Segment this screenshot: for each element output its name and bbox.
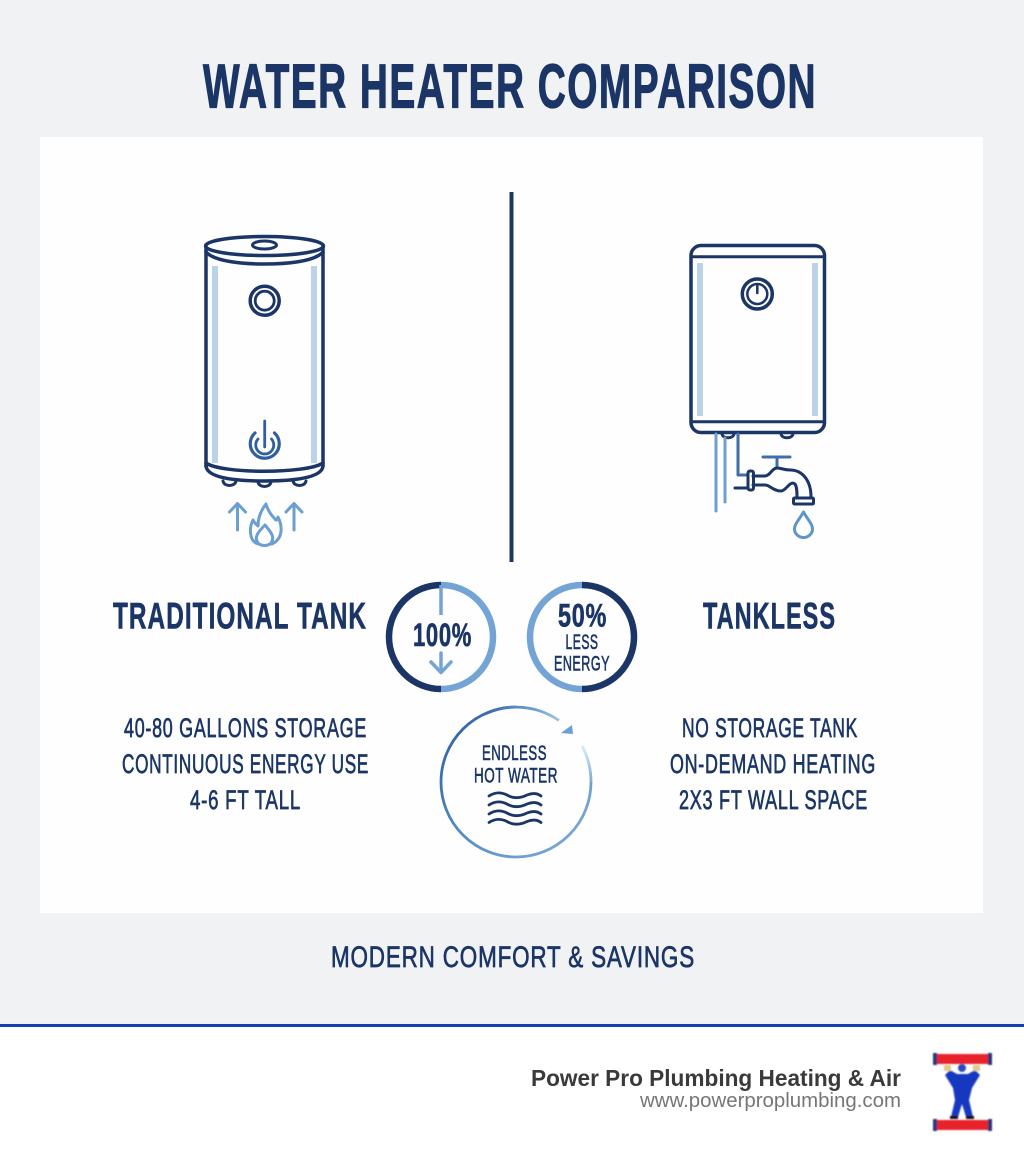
water drop (794, 512, 812, 538)
heading: tankless: TANKLESS (703, 596, 836, 636)
icon: traditional tank heater (206, 236, 324, 546)
list: traditional tank facts (122, 713, 369, 815)
icon: flame with arrows (230, 504, 302, 546)
list: tankless facts (670, 713, 876, 815)
list: traditional tank facts: 4-6 FT TALL (190, 785, 301, 815)
badge: endless hot water: HOT WATER (474, 764, 558, 788)
badge: endless hot water: ENDLESS (482, 742, 547, 765)
tagline: MODERN COMFORT & SAVINGS (331, 941, 695, 974)
badge: 50% less energy: ENERGY (554, 652, 610, 676)
footer (0, 1024, 1024, 1154)
heading: traditional tank: TRADITIONAL TANK (113, 596, 367, 636)
list: traditional tank facts: CONTINUOUS ENERGY USE (122, 749, 369, 779)
badge: 50% less energy (530, 585, 634, 689)
badge: 50% less energy: LESS (566, 631, 598, 654)
list: traditional tank facts: 40-80 GALLONS STORAGE (124, 713, 367, 743)
company name: Power Pro Plumbing Heating & Air (531, 1065, 901, 1091)
power button (250, 421, 279, 458)
badge: 100%: 100% (413, 617, 472, 653)
gauge (742, 279, 772, 309)
badge: 50% less energy: 50% (558, 598, 607, 634)
list: tankless facts: NO STORAGE TANK (682, 713, 858, 743)
list: tankless facts: 2X3 FT WALL SPACE (679, 785, 868, 815)
badge: 100% (389, 585, 493, 689)
faucet (735, 457, 814, 504)
gauge (250, 286, 279, 315)
website: www.powerproplumbing.com (639, 1090, 901, 1112)
logo: strongman lifting pipe (933, 1053, 992, 1131)
center divider (510, 192, 514, 562)
badge: endless hot water (441, 707, 591, 857)
panel: comparison (40, 137, 983, 913)
icon: tankless heater with faucet (691, 246, 824, 538)
water pipes (716, 434, 748, 511)
icon: water waves (489, 793, 541, 824)
list: tankless facts: ON-DEMAND HEATING (670, 749, 876, 779)
